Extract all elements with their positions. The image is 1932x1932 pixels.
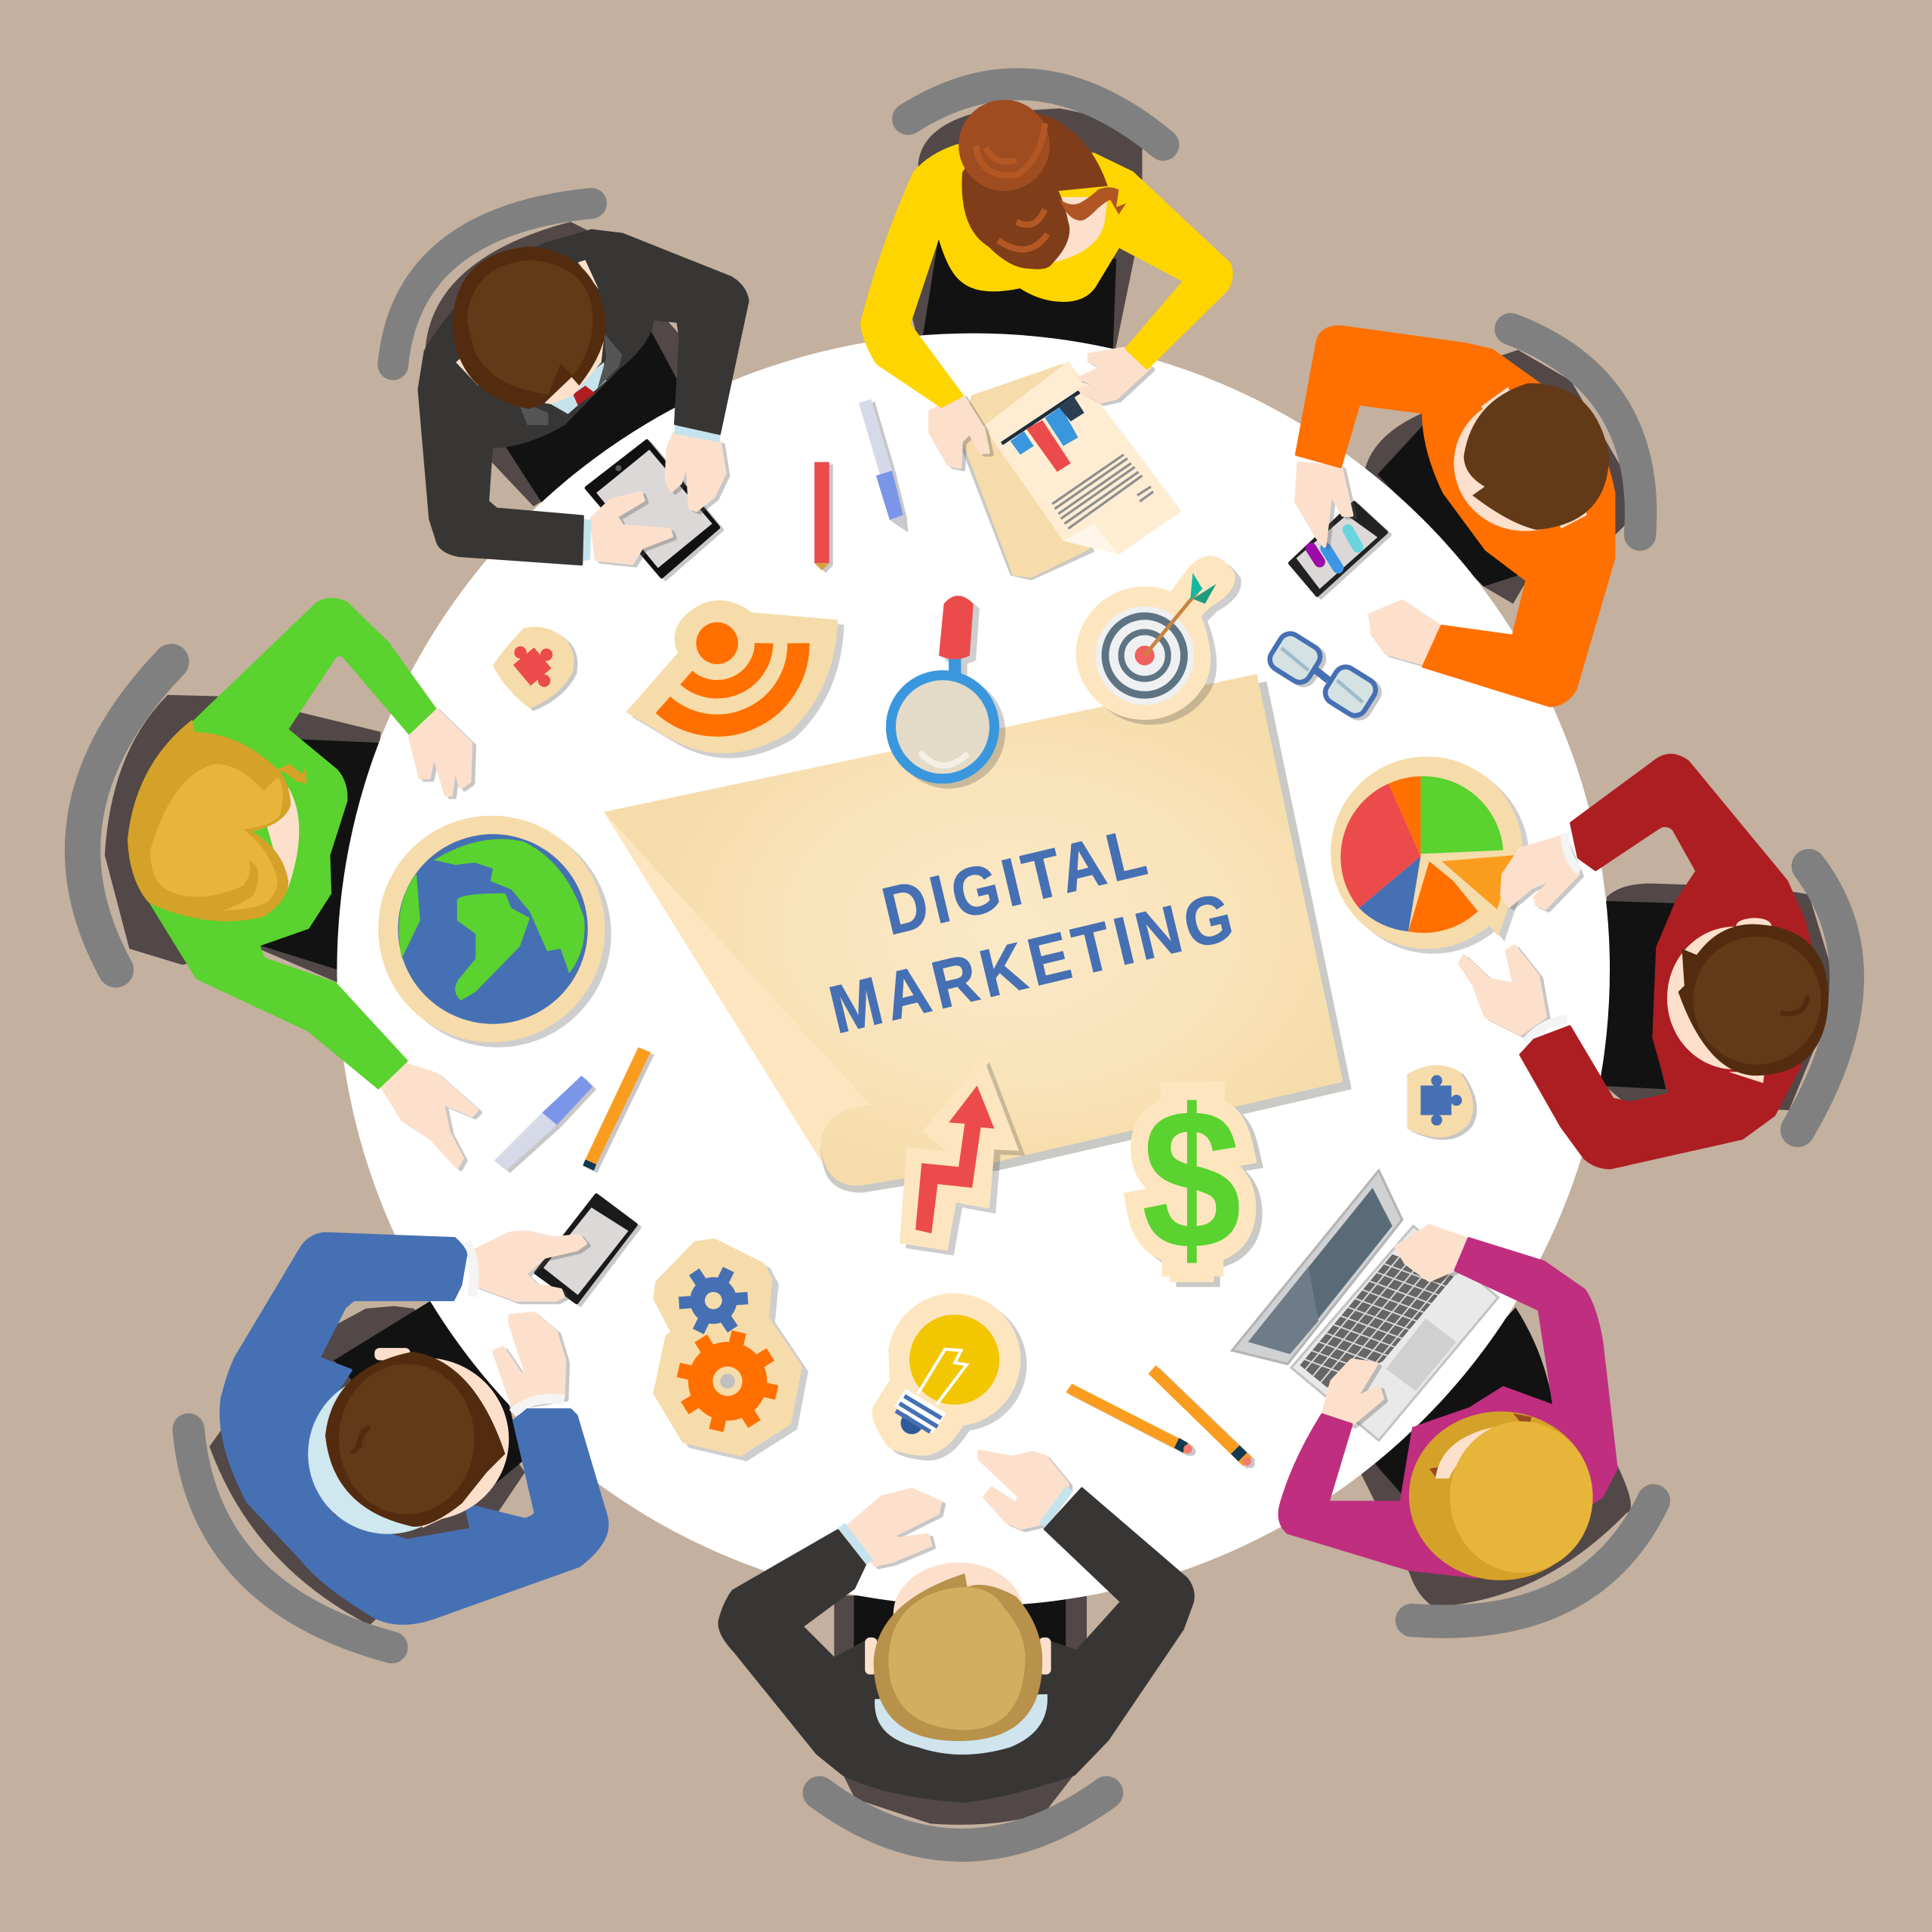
icon: pie chart: [1331, 756, 1527, 949]
cuffs: [466, 1242, 565, 1414]
documents: [958, 361, 1182, 580]
icon: red puzzle: [493, 627, 574, 709]
icon: dollar: $: [1148, 1073, 1247, 1296]
person: magenta woman: [1279, 1226, 1617, 1580]
cuffs: [841, 1488, 1069, 1562]
device: laptop: [1232, 1171, 1498, 1441]
icon: magnifier: [891, 595, 995, 779]
hands: [1323, 1226, 1465, 1424]
person: top woman in yellow: [861, 100, 1232, 467]
head: [308, 1348, 509, 1534]
device: blue man phone: [536, 1195, 635, 1303]
icon: dollar: $: [1142, 1068, 1241, 1291]
cuffs: [1525, 833, 1580, 1042]
person: bottom man: [719, 1451, 1193, 1801]
title text: DIGITAL: [875, 814, 1153, 950]
head: [865, 1562, 1051, 1755]
cuffs: [582, 425, 721, 561]
hands: [849, 1451, 1067, 1564]
device: tablet: [586, 441, 718, 577]
icon: glasses: [1266, 629, 1380, 720]
title text: MARKETING: [823, 879, 1240, 1048]
pencil: orange right b: [1149, 1365, 1252, 1466]
chair: green woman: [82, 662, 384, 986]
icon: globe: [378, 816, 605, 1042]
head: [1667, 918, 1829, 1083]
chair: blue man: [189, 1301, 525, 1647]
hands: [592, 434, 724, 563]
pencil: orange left: [583, 1048, 651, 1171]
hands: [377, 709, 477, 1167]
chair: magenta woman: [1361, 1307, 1654, 1622]
person: dark suit man: [419, 230, 748, 565]
chair: bottom man: [820, 1595, 1106, 1845]
pencil: orange right a: [1066, 1383, 1192, 1454]
person: red man: [1460, 755, 1829, 1168]
paper scroll: [604, 674, 1352, 1192]
head: [452, 247, 606, 409]
icon: blue puzzle: [1407, 1065, 1473, 1137]
hands: [1460, 837, 1578, 1034]
hands: [1297, 463, 1439, 664]
icon: light bulb: [872, 1294, 1020, 1456]
person: green woman: [128, 599, 477, 1167]
pen: blue top: [859, 399, 904, 530]
pencil: red: [814, 462, 829, 571]
chair: red man: [1595, 866, 1847, 1130]
hands: [931, 349, 1149, 467]
hands: [475, 1232, 586, 1406]
device: orange man phone: [1290, 503, 1386, 595]
pen: blue left: [494, 1075, 592, 1171]
person: blue man: [221, 1232, 608, 1623]
icon: gears: [653, 1238, 802, 1457]
table: [337, 334, 1610, 1606]
person: orange man: [1297, 327, 1614, 706]
head: [958, 100, 1126, 269]
icon: growth arrow: [900, 1057, 1019, 1251]
head: [128, 719, 307, 921]
head: [1454, 383, 1609, 531]
chair: dark suit man: [393, 203, 680, 506]
icon: target: [1075, 556, 1235, 720]
collar and tie: [518, 333, 622, 425]
chair: orange man: [1365, 329, 1641, 604]
icon: rss signal: [626, 600, 838, 753]
head: [1409, 1411, 1593, 1580]
chair: top woman: [908, 84, 1163, 357]
